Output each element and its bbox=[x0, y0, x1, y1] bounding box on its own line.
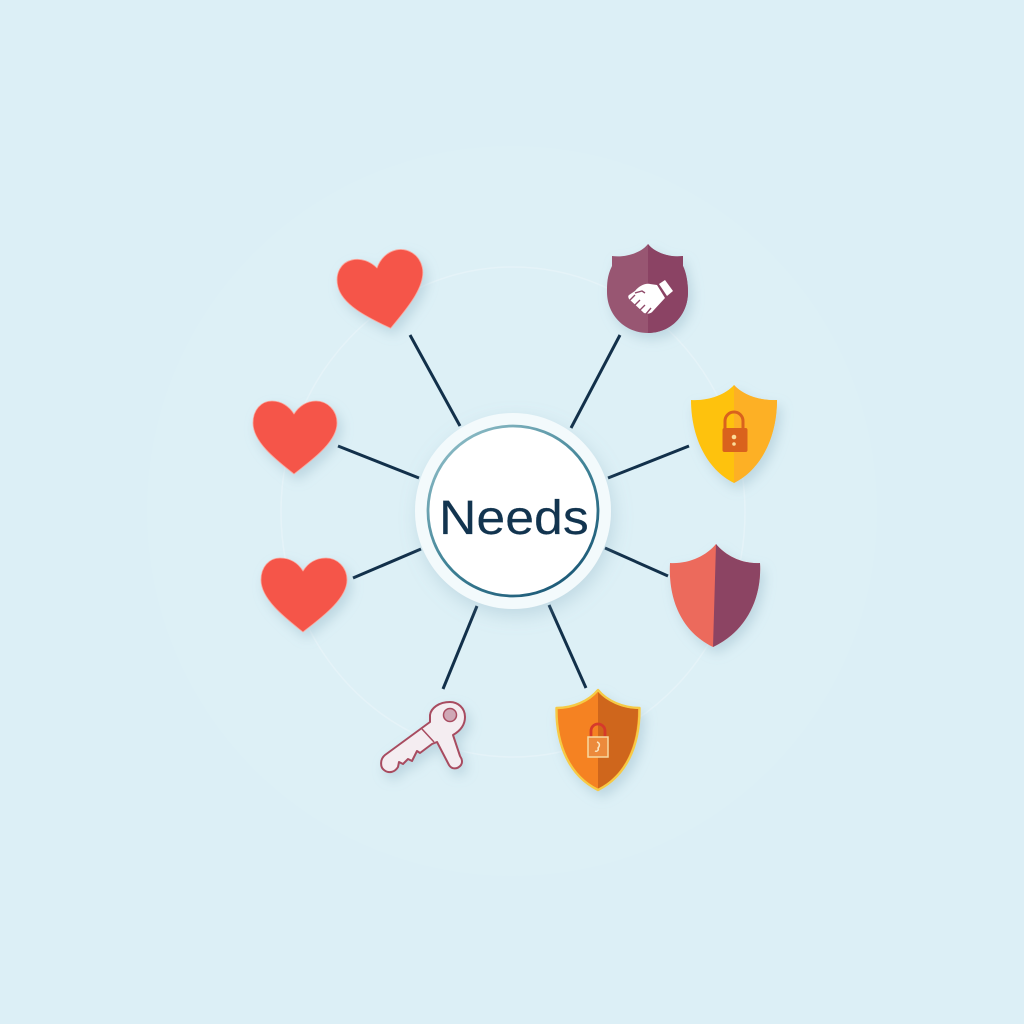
hub label: Needs bbox=[439, 491, 589, 545]
icon: handshake bbox=[628, 280, 673, 314]
icon: heart top left bbox=[333, 245, 434, 338]
central hub: Needs bbox=[415, 413, 611, 609]
icon: heart lower left bbox=[261, 558, 347, 632]
icon: key bbox=[381, 702, 465, 772]
icon: orange shield with lock bbox=[556, 690, 640, 790]
icon: heart middle left bbox=[253, 401, 337, 474]
icon: plum shield with handshake bbox=[607, 244, 688, 333]
icon: coral and plum shield bbox=[670, 544, 760, 647]
icon: outlined padlock bbox=[588, 724, 608, 757]
connector lines bbox=[338, 335, 689, 689]
icon: yellow shield with lock bbox=[691, 385, 777, 483]
icon: padlock bbox=[722, 412, 748, 452]
